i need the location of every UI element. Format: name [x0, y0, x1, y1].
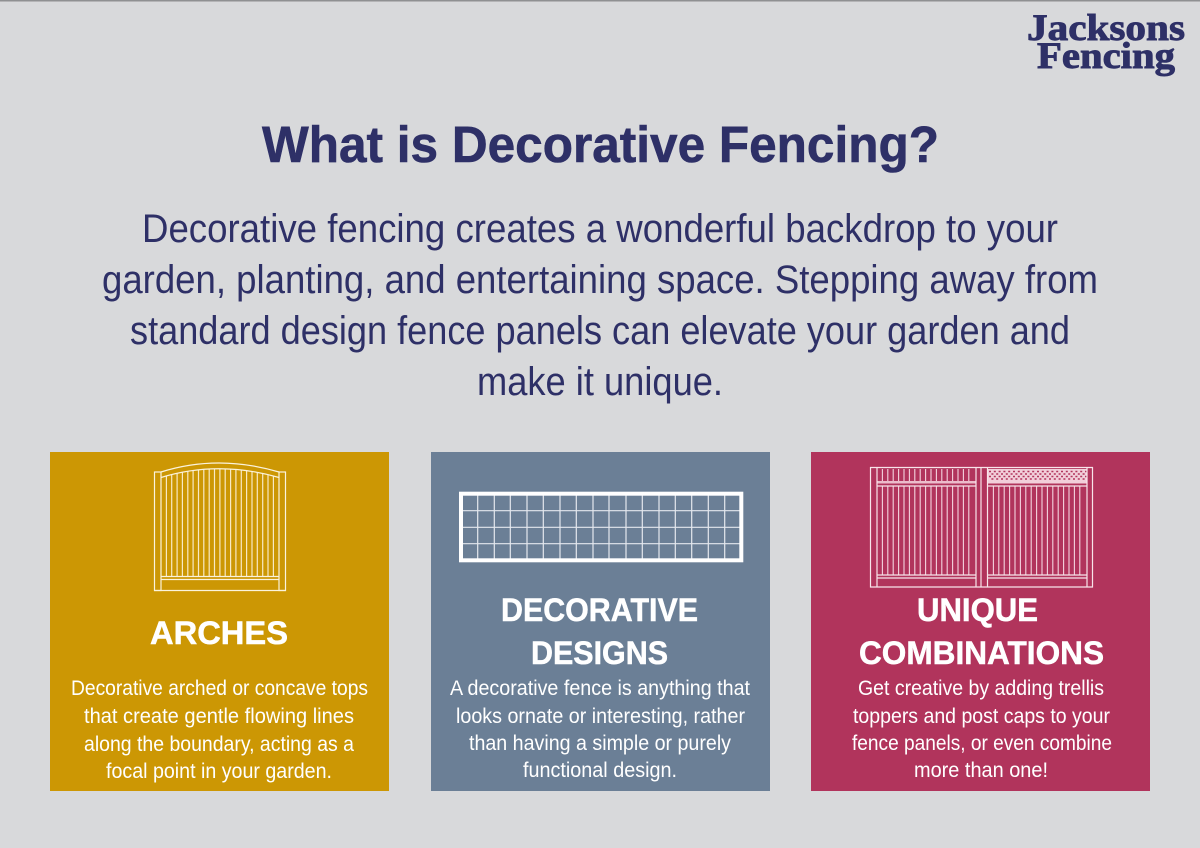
intro paragraph: garden, planting, and entertaining space. Stepping away from — [102, 258, 1098, 302]
text: unique combinations description: fence panels, or even combine — [852, 731, 1112, 755]
text: decorative designs description: looks ornate or interesting, rather — [456, 704, 745, 728]
logo: Jacksons Fencing — [1027, 8, 1185, 77]
panel: arches — [50, 452, 389, 791]
intro paragraph — [102, 207, 1098, 404]
text: unique combinations description — [852, 676, 1112, 782]
text: unique combinations description: Get creative by adding trellis — [858, 676, 1104, 700]
heading: decorative designs: DESIGNS — [531, 635, 668, 671]
text: decorative designs description: A decorative fence is anything that — [450, 676, 750, 700]
intro paragraph: standard design fence panels can elevate your garden and — [130, 309, 1070, 353]
intro paragraph: make it unique. — [477, 360, 723, 404]
logo: Jacksons Fencing: Jacksons — [1027, 8, 1185, 49]
panel: decorative designs — [431, 452, 770, 791]
text: unique combinations description: more than one! — [914, 758, 1048, 782]
text: arches description: along the boundary, acting as a — [84, 732, 354, 756]
text: decorative designs description: functional design. — [523, 758, 677, 782]
intro paragraph: Decorative fencing creates a wonderful backdrop to your — [142, 207, 1058, 251]
icon: arched fence panel — [154, 460, 286, 590]
heading: arches: ARCHES — [150, 615, 288, 651]
logo: Jacksons Fencing: Fencing — [1037, 36, 1176, 77]
text: decorative designs description — [450, 676, 750, 782]
heading: decorative designs: DECORATIVE — [501, 592, 698, 628]
heading: unique combinations — [859, 592, 1104, 671]
icon: combined fence panels with trellis toppers — [870, 467, 1093, 588]
heading: unique combinations: COMBINATIONS — [859, 635, 1104, 671]
text: arches description: Decorative arched or concave tops — [71, 676, 368, 700]
heading: decorative designs — [501, 592, 698, 671]
title: What is Decorative Fencing? — [262, 116, 939, 173]
text: arches description: that create gentle flowing lines — [84, 704, 354, 728]
heading: unique combinations: UNIQUE — [917, 592, 1038, 628]
text: arches description: focal point in your garden. — [106, 759, 332, 783]
panel: unique combinations — [811, 452, 1150, 791]
icon: decorative grid fence — [461, 494, 741, 560]
text: unique combinations description: toppers and post caps to your — [853, 704, 1110, 728]
text: arches description — [71, 676, 368, 783]
text: decorative designs description: than having a simple or purely — [469, 731, 731, 755]
